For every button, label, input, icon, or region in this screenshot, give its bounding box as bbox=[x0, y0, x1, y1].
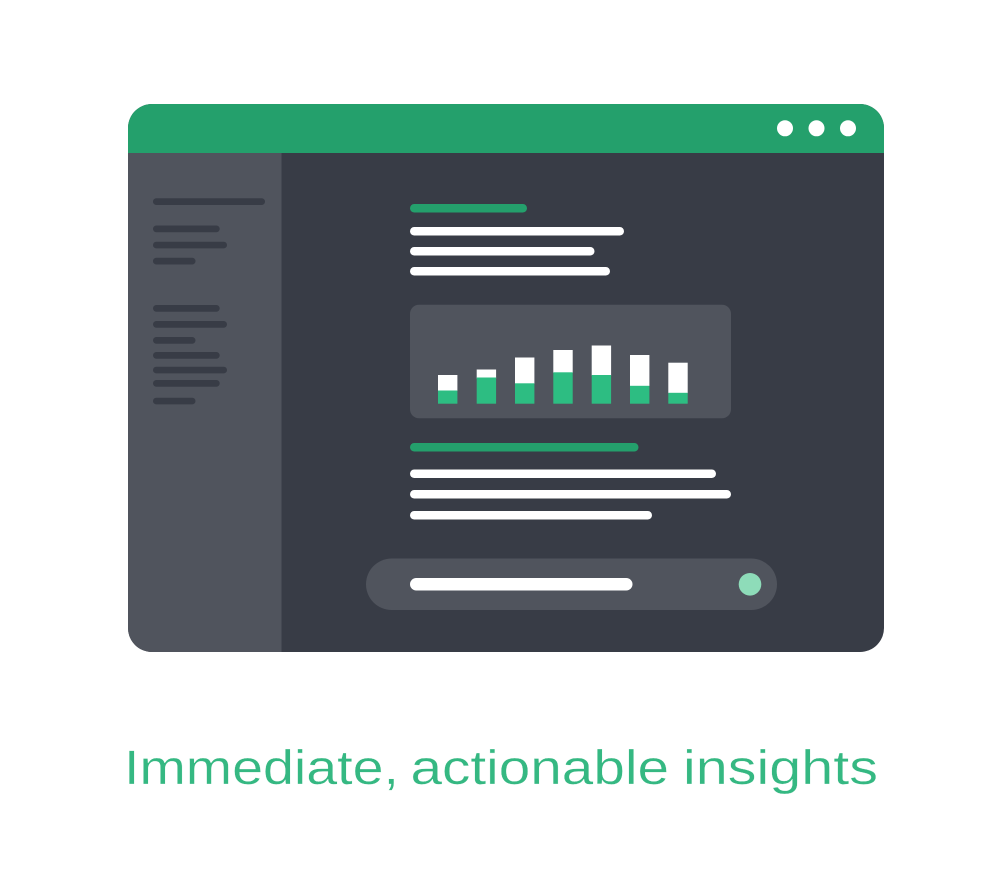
caption: insights bbox=[683, 742, 878, 795]
sidebar menu group 1 bbox=[153, 226, 227, 264]
input bar bbox=[366, 558, 777, 610]
caption bbox=[124, 742, 878, 795]
chart panel bbox=[410, 305, 731, 418]
caption: Immediate, bbox=[124, 742, 399, 795]
panel: sidebar bbox=[128, 153, 282, 652]
input text line bbox=[410, 578, 632, 590]
text lines block 2 bbox=[410, 470, 731, 520]
panel: browser window bbox=[128, 104, 884, 652]
title bar bbox=[128, 104, 884, 153]
window control dots bbox=[777, 120, 856, 136]
sidebar menu group 2 bbox=[153, 305, 227, 404]
bar chart bbox=[438, 346, 688, 404]
input button bbox=[739, 573, 761, 596]
caption: actionable bbox=[410, 742, 669, 795]
sidebar heading line bbox=[153, 198, 265, 205]
text lines block 1 bbox=[410, 227, 624, 276]
green heading line 2 bbox=[410, 443, 638, 452]
green heading line 1 bbox=[410, 204, 527, 212]
